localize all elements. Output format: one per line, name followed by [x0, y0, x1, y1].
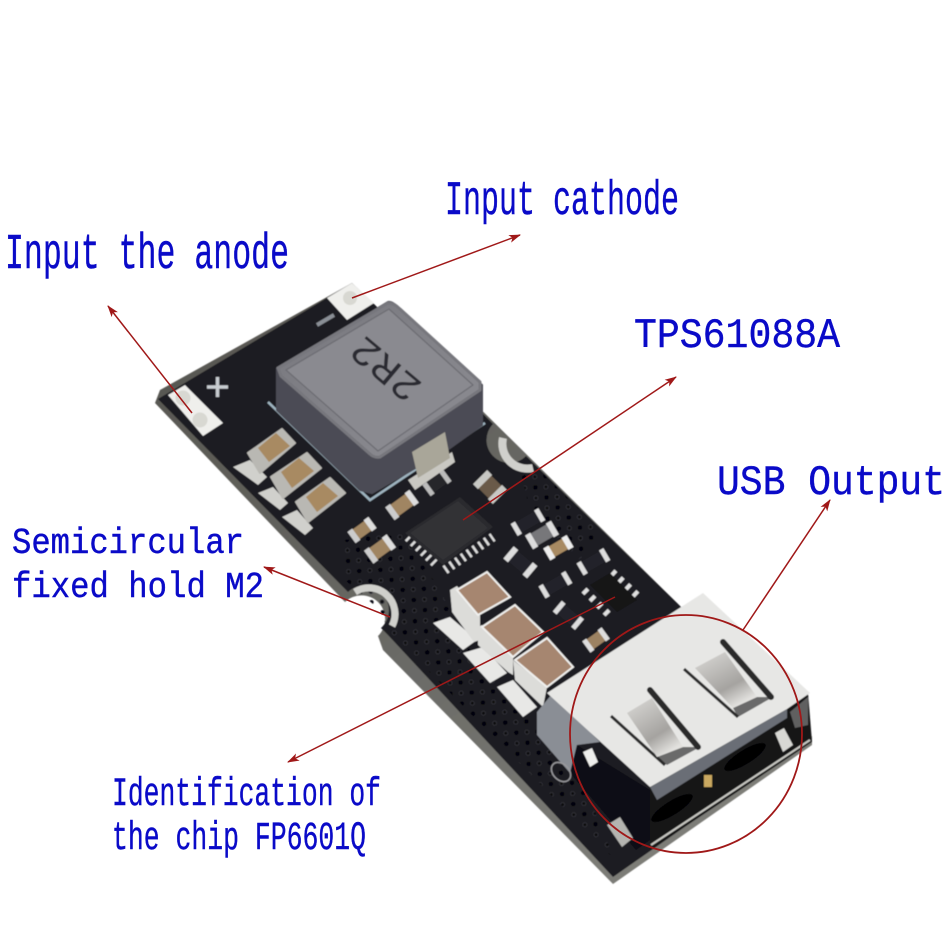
large capacitors [433, 572, 573, 717]
USB top shell [547, 593, 810, 787]
chip TPS61088A [405, 497, 493, 570]
label: chip identification: Identification of [112, 773, 381, 818]
USB front opening [650, 693, 812, 850]
USB clip right [684, 642, 773, 717]
label: semicircular fixed hold [12, 523, 264, 608]
board top face [158, 283, 812, 877]
USB connector [537, 593, 812, 850]
via field upper [520, 470, 600, 560]
label: chip identification [112, 773, 381, 862]
plus mark [207, 377, 228, 397]
inductor terminal [408, 432, 455, 490]
label: input the anode: Input the anode [5, 227, 289, 284]
inductor outline silkscreen [268, 402, 485, 500]
via field [345, 530, 615, 860]
arrow: FP6601Q chip [288, 597, 615, 762]
USB clip left [611, 690, 700, 765]
chip FP6601Q [584, 572, 640, 616]
anode pad [168, 385, 223, 436]
callout ring: USB [570, 615, 802, 853]
arrow: semicircular hole [264, 567, 390, 617]
arrow: USB output [743, 500, 830, 630]
small parts [347, 470, 610, 653]
minus mark [317, 315, 334, 325]
left semicircular pad [355, 588, 395, 626]
label: chip identification: the chip FP6601Q [112, 817, 366, 862]
USB side [537, 694, 600, 773]
arrow: cathode [352, 235, 520, 298]
board corner components [548, 759, 574, 785]
small capacitors [233, 429, 345, 535]
PCB module photo [155, 283, 812, 884]
label: input cathode: Input cathode [445, 175, 679, 229]
inductor [277, 302, 482, 493]
label: semicircular fixed hold: fixed hold M2 [12, 567, 264, 608]
cathode pad [327, 283, 374, 320]
arrow: TPS61088A [463, 377, 676, 520]
label: TPS61088A: TPS61088A [634, 312, 841, 360]
right semicircular pad [502, 438, 533, 469]
arrow: anode [108, 306, 192, 413]
inductor marking: 2R2 [344, 324, 432, 409]
label: semicircular fixed hold: Semicircular [12, 523, 244, 564]
board edge [155, 283, 812, 884]
